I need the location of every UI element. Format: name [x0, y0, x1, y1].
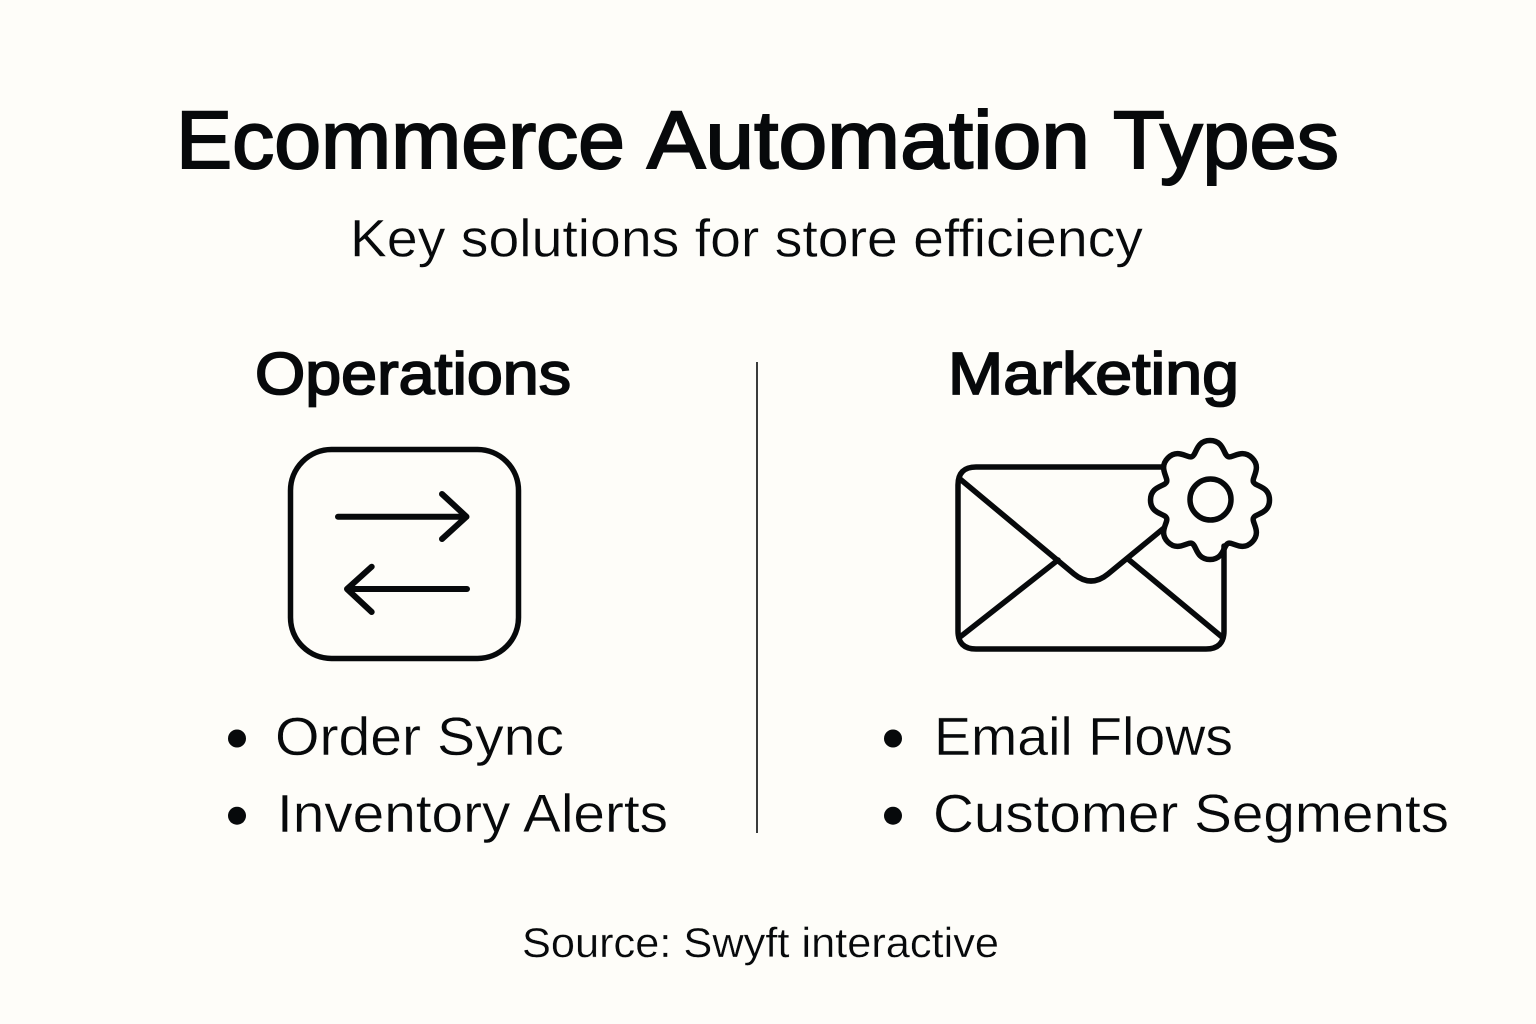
icon: sync arrows [290, 450, 518, 658]
panel: operations [228, 341, 668, 844]
subtitle: Key solutions for store efficiency [350, 210, 1144, 268]
list: operations items: Inventory Alerts [277, 784, 668, 844]
list: marketing items: Customer Segments [933, 784, 1449, 844]
list: marketing items: Email Flows [934, 707, 1233, 767]
source note: Source: Swyft interactive [522, 919, 999, 966]
list: operations items: Order Sync [275, 707, 564, 767]
title [176, 95, 1339, 186]
heading: operations: Operations [255, 341, 571, 407]
title: Ecommerce [176, 95, 625, 186]
list: operations items [228, 707, 668, 844]
icon: envelope with gear [958, 440, 1270, 649]
title: Types [1113, 95, 1339, 186]
panel: marketing [884, 341, 1449, 844]
list: marketing items [884, 707, 1449, 844]
title: Automation [647, 95, 1090, 186]
heading: marketing: Marketing [948, 341, 1239, 407]
